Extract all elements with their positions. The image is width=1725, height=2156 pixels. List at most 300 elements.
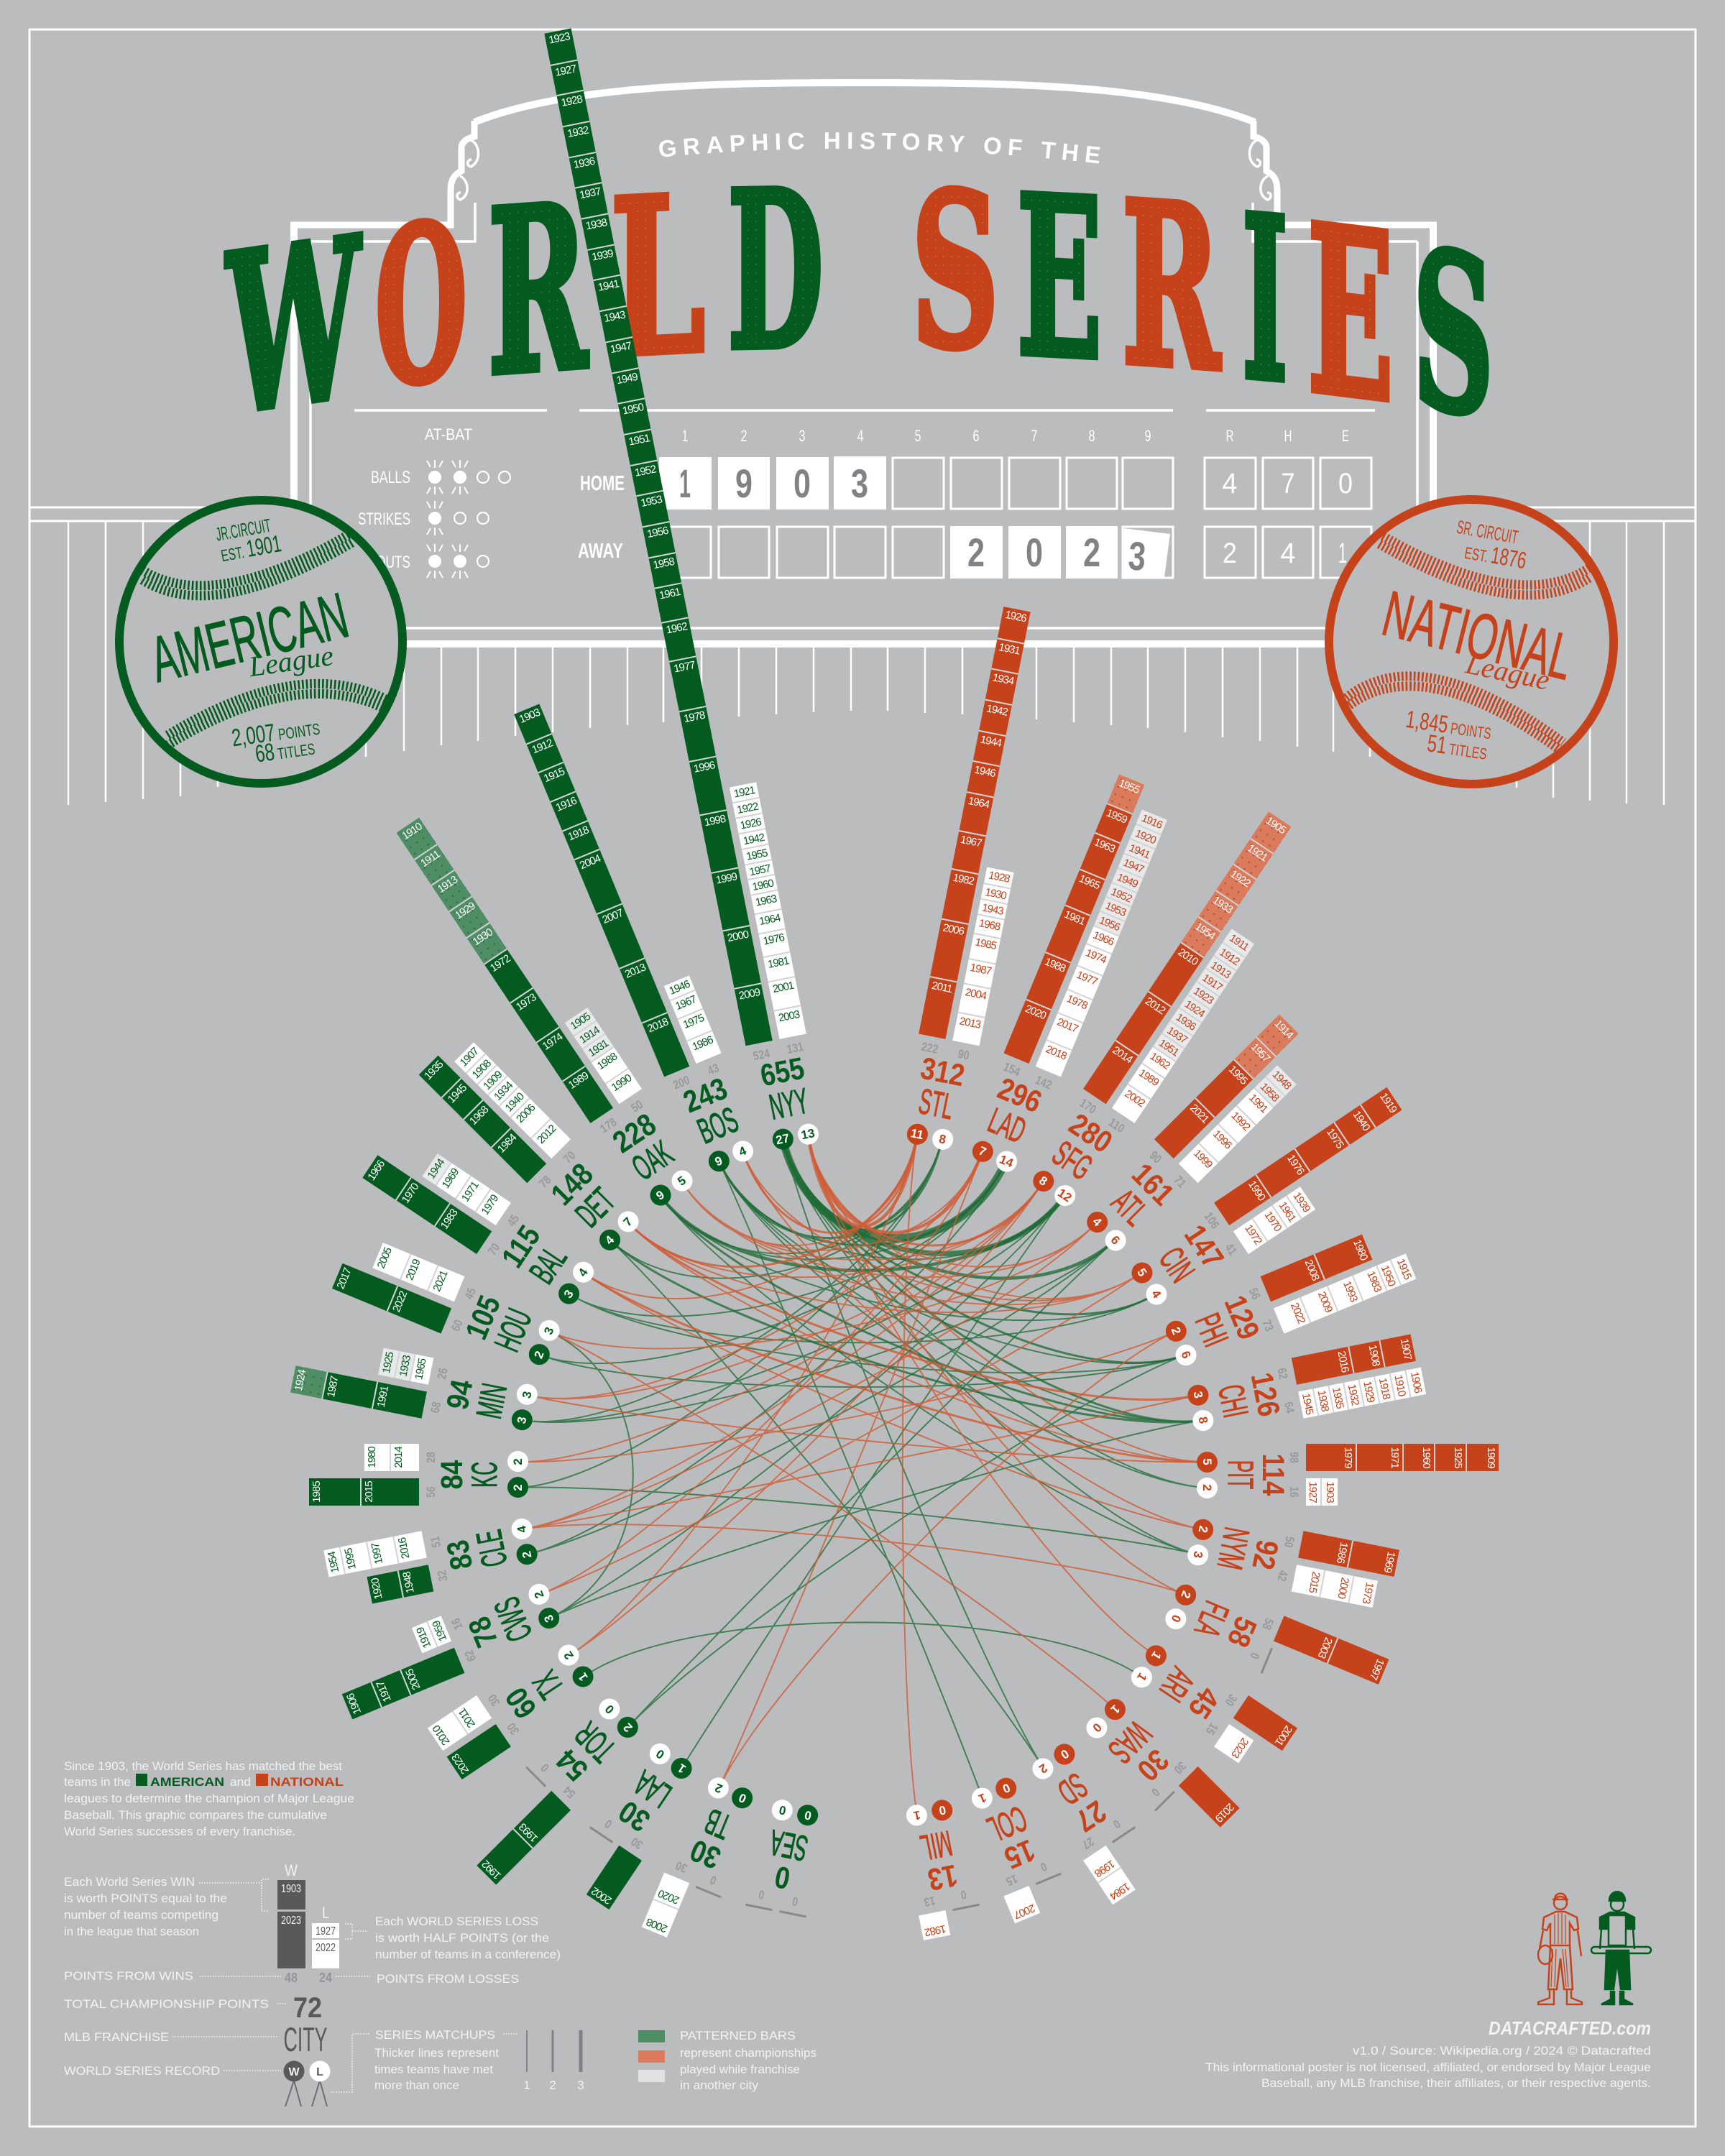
scoreboard: 2 — [1223, 538, 1237, 569]
text: 0 — [602, 1817, 615, 1831]
CIN wins bar — [1214, 1087, 1402, 1225]
ATL losses bar: 1992 — [1228, 1110, 1252, 1133]
CHI wins bar: 1907 — [1398, 1337, 1414, 1360]
MIN losses bar: 1933 — [397, 1355, 413, 1378]
LAD losses bar: 2018 — [1044, 1043, 1068, 1062]
text: 90 — [957, 1047, 970, 1063]
LAD wins bar: 1965 — [1077, 872, 1102, 892]
BOS wins bar: 1915 — [542, 766, 566, 785]
NYY wins bar: 1928 — [560, 93, 583, 109]
text: 3 — [561, 1287, 576, 1301]
text: 129 — [1218, 1291, 1266, 1345]
scoreboard: R — [1226, 427, 1233, 445]
ATL losses bar: 1996 — [1210, 1128, 1234, 1151]
NYY wins bar: 1953 — [640, 494, 663, 510]
NYM losses bar: 2000 — [1335, 1576, 1351, 1600]
how-to-read legend: SERIES MATCHUPS — [375, 2028, 495, 2042]
CHI losses bar — [1298, 1368, 1427, 1419]
national league teams — [0, 0, 1725, 1]
STL losses bar: 1985 — [974, 936, 997, 952]
NYY wins bar: 1961 — [658, 586, 681, 602]
text: 6 — [1108, 1233, 1123, 1247]
LAD wins bar: 1963 — [1092, 836, 1116, 855]
text: 2 — [1179, 1589, 1194, 1600]
NYY wins bar: 1952 — [634, 463, 657, 479]
team: HOU — [332, 1243, 559, 1365]
CIN wins bar: 1975 — [1324, 1126, 1346, 1151]
text: 90 — [1146, 1148, 1164, 1166]
team: COL — [862, 1474, 863, 1475]
baseball badge: national league: 1,845 POINTS — [1404, 706, 1494, 745]
DET wins bar: 1968 — [467, 1104, 491, 1128]
NYY losses bar: 1942 — [742, 831, 765, 847]
text: 15 — [1000, 1833, 1039, 1875]
NYY wins bar: 1927 — [554, 63, 577, 78]
HOU wins bar: 2022 — [390, 1290, 410, 1314]
scoreboard: AWAY — [578, 540, 623, 563]
FLA zero losses — [1261, 1648, 1273, 1674]
text: 58 — [1220, 1612, 1263, 1651]
scoreboard: 4 — [1281, 538, 1295, 569]
NYY wins bar — [544, 28, 773, 1046]
text: 54 — [561, 1783, 579, 1801]
how-to-read legend: 3 — [577, 2078, 584, 2092]
TB zero wins — [695, 1886, 722, 1898]
SFG losses bar: 2002 — [1123, 1087, 1147, 1110]
american league teams — [290, 28, 819, 1938]
text: WAS — [1101, 1713, 1159, 1771]
FLA wins bar: 1997 — [1367, 1657, 1386, 1681]
text: CLE — [469, 1526, 515, 1570]
team: KC — [309, 1444, 528, 1506]
OAK losses bar: 1990 — [609, 1072, 633, 1094]
CIN losses bar: 1970 — [1261, 1210, 1284, 1234]
text: OAK — [625, 1133, 680, 1188]
text: 15 — [1203, 1720, 1220, 1737]
text: 78 — [536, 1173, 554, 1191]
PIT wins bar: 1979 — [1342, 1447, 1354, 1468]
text: 200 — [671, 1073, 691, 1092]
ATL wins bar — [1154, 1015, 1298, 1158]
baseball badge: national league: League — [1463, 647, 1552, 696]
text: 4 — [514, 1524, 529, 1534]
MIN wins bar: 1991 — [375, 1386, 391, 1409]
SFG losses bar: 1937 — [1165, 1024, 1190, 1046]
CHI losses bar: 1938 — [1315, 1389, 1331, 1412]
team: LAA — [586, 1743, 692, 1910]
ATL wins bar: 1914 — [1271, 1018, 1295, 1041]
COL zero wins — [1036, 1873, 1062, 1885]
text: 0 — [1039, 1859, 1049, 1874]
text: 45 — [462, 1286, 479, 1302]
SFG wins bar — [1083, 811, 1291, 1104]
text: 15 — [1004, 1871, 1019, 1889]
title: world series: D — [727, 142, 824, 398]
DET losses bar: 2006 — [514, 1102, 538, 1125]
text: 26 — [435, 1367, 451, 1381]
title: world series — [226, 142, 1494, 467]
scoreboard: H — [1284, 427, 1292, 445]
baseball badge: american league: JR.CIRCUIT — [214, 515, 272, 545]
OAK wins bar: 1972 — [488, 952, 512, 975]
text: 8 — [938, 1131, 947, 1146]
NYY losses bar: 2001 — [772, 980, 795, 995]
team: CLE — [323, 1518, 538, 1604]
OAK losses bar: 1931 — [586, 1038, 610, 1059]
subtitle: graphic history of the: GRAPHIC HISTORY OF THE — [659, 132, 1100, 164]
intro text — [64, 1759, 354, 1838]
CHI losses bar: 1935 — [1330, 1386, 1346, 1409]
text: 2 — [531, 1349, 546, 1360]
SFG wins bar: 1905 — [1264, 814, 1288, 837]
PHI losses bar: 1983 — [1364, 1269, 1384, 1294]
team: CWS — [342, 1584, 559, 1719]
CHI losses bar: 1932 — [1346, 1383, 1361, 1406]
BOS wins bar: 1912 — [530, 737, 554, 756]
CLE losses bar: 1997 — [369, 1542, 385, 1565]
STL wins bar: 1964 — [967, 795, 990, 811]
intro text: teams in the — [64, 1775, 131, 1789]
text: 9 — [713, 1153, 724, 1169]
scoreboard: STRIKES — [358, 510, 410, 529]
text: 30 — [1130, 1742, 1175, 1787]
BOS losses bar: 1986 — [690, 1033, 714, 1053]
BOS losses bar: 1975 — [681, 1012, 706, 1031]
STL wins bar: 1967 — [960, 833, 983, 849]
text: 1 — [575, 1670, 590, 1684]
NYY wins bar: 2000 — [727, 929, 750, 944]
ATL losses bar: 1948 — [1269, 1069, 1293, 1092]
ATL losses bar: 1958 — [1258, 1081, 1281, 1104]
scoreboard: 9 — [1144, 427, 1151, 445]
TOR wins bar — [477, 1791, 571, 1885]
NYM wins bar — [1298, 1531, 1399, 1577]
scoreboard: 1 — [682, 427, 688, 445]
text: 2 — [510, 1458, 525, 1465]
text: 83 — [440, 1537, 479, 1572]
team: SFG — [862, 1474, 863, 1475]
BAL wins bar — [362, 1155, 492, 1254]
baseball badge: american league: AMERICAN — [144, 580, 355, 696]
scoreboard: 0 — [1338, 468, 1353, 499]
KC wins bar: 2015 — [363, 1481, 375, 1503]
footer credits — [1205, 2017, 1651, 2090]
NYY wins bar: 1939 — [591, 247, 614, 264]
team: STL — [862, 1474, 863, 1475]
text: 2 — [1196, 1524, 1211, 1534]
text: LAA — [627, 1762, 678, 1815]
text: 30 — [485, 1692, 503, 1708]
text: 2 — [1036, 1761, 1050, 1777]
PIT wins bar: 1909 — [1485, 1447, 1497, 1468]
CHI losses bar: 1918 — [1376, 1377, 1392, 1400]
CWS losses bar: 1959 — [431, 1619, 450, 1643]
CLE losses bar: 1995 — [342, 1547, 359, 1570]
text: 2 — [620, 1720, 635, 1735]
CIN losses bar: 1939 — [1291, 1190, 1312, 1215]
CLE wins bar: 1948 — [401, 1571, 417, 1594]
DET losses bar: 1909 — [481, 1069, 505, 1092]
text: 178 — [597, 1115, 619, 1135]
NYY wins bar: 1998 — [704, 813, 727, 829]
text: 54 — [550, 1742, 595, 1787]
text: 243 — [678, 1072, 732, 1120]
text: 1 — [1149, 1649, 1164, 1662]
text: BAL — [522, 1239, 575, 1291]
icon: pitcher figure — [1538, 1894, 1582, 2004]
OAK wins bar: 1989 — [566, 1069, 591, 1092]
LAD wins bar: 1955 — [1117, 777, 1141, 796]
text: 2 — [531, 1589, 546, 1600]
LAD losses bar: 1916 — [1140, 811, 1164, 831]
text: 5 — [1135, 1266, 1150, 1279]
text: 0 — [538, 1761, 552, 1774]
COL losses bar: 2007 — [1013, 1902, 1036, 1921]
NYY wins bar: 1947 — [610, 340, 632, 356]
OAK losses bar: 1988 — [595, 1051, 620, 1072]
BOS losses bar: 1946 — [667, 978, 691, 998]
NYM losses bar: 1973 — [1360, 1581, 1376, 1604]
LAD losses bar: 2017 — [1055, 1015, 1080, 1035]
text: 524 — [752, 1046, 771, 1063]
text: 312 — [918, 1051, 967, 1093]
LAA wins bar: 2002 — [590, 1884, 614, 1907]
text: 106 — [1202, 1210, 1222, 1231]
NYY losses bar: 1976 — [762, 931, 785, 947]
how-to-read legend: 24 — [319, 1971, 332, 1985]
NYY wins bar: 1943 — [603, 309, 626, 325]
PHI losses bar: 1993 — [1340, 1279, 1360, 1304]
how-to-read legend: MLB FRANCHISE — [64, 2030, 169, 2044]
text: 2 — [713, 1781, 724, 1796]
text: 58 — [1259, 1616, 1276, 1631]
text: 0 — [1169, 1613, 1184, 1624]
SFG losses bar: 1962 — [1148, 1050, 1172, 1072]
text: 94 — [440, 1377, 479, 1412]
how-to-read legend: played while franchise — [680, 2063, 800, 2076]
text: 27 — [1080, 1834, 1096, 1852]
title: world series: L — [610, 148, 706, 406]
scoreboard: 8 — [1088, 427, 1095, 445]
BAL losses bar: 1979 — [479, 1193, 500, 1217]
team: SEA — [862, 1474, 863, 1475]
text: 16 — [1287, 1486, 1301, 1498]
STL wins bar: 1946 — [973, 764, 996, 780]
footer credits: v1.0 / Source: Wikipedia.org / 2024 © Datacrafted — [1353, 2044, 1651, 2058]
text: 6 — [1179, 1349, 1194, 1360]
TOR wins bar: 1993 — [517, 1821, 540, 1845]
text: FLA — [1187, 1596, 1237, 1643]
text: 0 — [1110, 1817, 1123, 1831]
PHI losses bar: 1915 — [1394, 1257, 1414, 1281]
LAD losses bar: 1947 — [1121, 857, 1146, 876]
NYY wins bar: 1938 — [584, 216, 608, 233]
DET wins bar: 1935 — [422, 1059, 446, 1082]
TX losses bar: 2011 — [456, 1706, 478, 1730]
CWS losses bar: 1919 — [415, 1626, 434, 1649]
text: 9 — [653, 1187, 667, 1202]
team: FLA — [862, 1474, 863, 1475]
PIT wins bar: 1960 — [1420, 1447, 1432, 1468]
text: 1 — [977, 1791, 988, 1806]
text: 27 — [1069, 1794, 1112, 1838]
team: MIN — [290, 1348, 538, 1430]
OAK losses bar: 1905 — [568, 1010, 592, 1032]
STL losses bar — [952, 867, 1013, 1046]
team: TOR — [477, 1699, 638, 1885]
NYY losses bar: 1981 — [767, 954, 790, 970]
LAA zero losses — [589, 1826, 613, 1843]
text: ARI — [1151, 1661, 1202, 1709]
SFG losses bar: 1923 — [1191, 985, 1215, 1007]
NYY wins bar: 1941 — [597, 278, 620, 294]
outfield fence and pickets — [29, 83, 1696, 805]
DET wins bar: 1984 — [495, 1132, 519, 1156]
SFG losses bar: 1924 — [1182, 998, 1207, 1020]
SFG losses bar: 1989 — [1136, 1067, 1161, 1088]
HOU losses bar: 2019 — [403, 1258, 423, 1282]
MIL losses bar: 1982 — [924, 1922, 947, 1939]
SFG losses bar: 1912 — [1217, 946, 1241, 968]
text: 0 — [778, 1803, 787, 1818]
team: DET — [418, 1042, 638, 1250]
text: 3 — [1191, 1550, 1206, 1560]
scoreboard: BALLS — [371, 468, 410, 487]
baseball badge: national league: 51 TITLES — [1425, 729, 1489, 765]
text: 1 — [1135, 1670, 1150, 1684]
KC losses bar: 2014 — [392, 1447, 405, 1468]
NYY losses bar: 2003 — [778, 1008, 801, 1024]
text: 161 — [1125, 1157, 1180, 1212]
SD zero wins — [1112, 1826, 1136, 1843]
text: 30 — [1171, 1759, 1189, 1777]
LAD losses bar: 1949 — [1116, 871, 1139, 890]
team: CIN — [862, 1474, 863, 1475]
FLA wins bar — [1274, 1616, 1389, 1685]
intro text: and — [230, 1775, 251, 1789]
team: SD — [862, 1474, 863, 1475]
PHI losses bar — [1274, 1253, 1417, 1334]
TOR wins bar: 1992 — [479, 1858, 503, 1881]
baseball badge: american league: 2,007 POINTS — [230, 713, 321, 752]
text: 43 — [706, 1061, 721, 1078]
OAK losses bar — [565, 1008, 642, 1104]
BOS wins bar: 2004 — [578, 853, 602, 872]
text: 4 — [575, 1266, 590, 1279]
title: world series: E — [1016, 147, 1103, 410]
BOS wins bar: 2007 — [601, 907, 625, 926]
text: 4 — [602, 1233, 617, 1247]
NYY losses bar: 1926 — [739, 816, 762, 832]
NYY wins bar: 1923 — [548, 30, 571, 47]
team: TX — [428, 1644, 594, 1779]
baseball badge: american league — [119, 500, 402, 783]
CHI wins bar: 2016 — [1335, 1350, 1351, 1373]
text: NYM — [1210, 1524, 1257, 1572]
CIN losses bar — [1233, 1187, 1315, 1254]
scoreboard: AT-BAT — [425, 425, 472, 443]
NYY wins bar: 1951 — [627, 432, 650, 448]
NYM wins bar: 1986 — [1334, 1541, 1350, 1564]
text: KC — [464, 1462, 505, 1488]
SD losses bar: 1984 — [1108, 1880, 1132, 1902]
text: 3 — [1191, 1390, 1206, 1399]
CWS wins bar: 2005 — [404, 1667, 423, 1692]
CWS losses bar — [412, 1616, 451, 1653]
LAD losses bar: 1952 — [1109, 885, 1133, 905]
MIN losses bar: 1925 — [380, 1351, 397, 1374]
ATL losses bar: 1999 — [1191, 1147, 1215, 1171]
text: 16 — [448, 1616, 466, 1631]
OAK losses bar: 1914 — [578, 1025, 602, 1046]
FLA wins bar: 2003 — [1315, 1636, 1335, 1659]
CHI wins bar: 1908 — [1366, 1344, 1382, 1367]
OAK wins bar: 1929 — [453, 900, 477, 922]
MIN losses bar — [378, 1348, 434, 1385]
how-to-read legend: is worth POINTS equal to the — [64, 1892, 227, 1905]
scoreboard: 6 — [973, 427, 979, 445]
title: world series: W — [226, 189, 362, 465]
baseball badge: american league: EST. 1901 — [218, 530, 283, 566]
BAL wins bar: 1966 — [365, 1158, 387, 1183]
text: 228 — [607, 1107, 662, 1160]
text: 222 — [920, 1040, 939, 1056]
OAK wins bar: 1911 — [418, 848, 442, 870]
WAS zero losses — [1154, 1791, 1175, 1812]
MIL zero wins — [952, 1904, 980, 1911]
footer credits: Baseball, any MLB franchise, their affiliates, or their respective agents. — [1261, 2076, 1651, 2090]
ATL losses bar: 1991 — [1246, 1092, 1270, 1115]
how-to-read legend: in another city — [680, 2078, 759, 2092]
PHI wins bar — [1261, 1235, 1372, 1302]
CLE losses bar: 1954 — [326, 1551, 341, 1574]
text: 1 — [1108, 1703, 1123, 1717]
american league winners: chords — [518, 1139, 1208, 1798]
text: 30 — [613, 1794, 656, 1838]
team: MIL — [862, 1474, 863, 1475]
national league winners: chords — [518, 1134, 1208, 1815]
how-to-read legend: L — [316, 2066, 323, 2078]
how-to-read legend: times teams have met — [374, 2063, 493, 2076]
DET wins bar: 1945 — [445, 1082, 469, 1105]
MIN wins bar: 1924 — [293, 1369, 309, 1392]
STL wins bar: 2011 — [931, 980, 953, 995]
text: 0 — [1000, 1781, 1012, 1796]
how-to-read legend: POINTS FROM LOSSES — [377, 1972, 519, 1986]
STL wins bar: 2006 — [942, 922, 965, 938]
SFG losses bar: 1936 — [1174, 1011, 1198, 1033]
how-to-read legend: 2022 — [316, 1942, 336, 1954]
STL wins bar: 1931 — [998, 641, 1021, 657]
MIN wins bar: 1987 — [325, 1376, 341, 1399]
NYY losses bar: 1960 — [751, 877, 774, 893]
scoreboard: 3 — [1127, 533, 1147, 579]
scoreboard: HOME — [580, 472, 625, 495]
team: ATL — [862, 1474, 863, 1475]
text: 0 — [960, 1887, 967, 1902]
CIN wins bar: 1990 — [1246, 1179, 1268, 1203]
text: SD — [1051, 1765, 1095, 1813]
LAD losses bar: 1974 — [1084, 947, 1108, 967]
KC losses bar — [364, 1444, 419, 1471]
LAD wins bar: 1988 — [1043, 956, 1067, 975]
BAL losses bar: 1944 — [426, 1157, 447, 1181]
text: 32 — [435, 1569, 451, 1583]
scoreboard: 0 — [794, 461, 811, 506]
LAD losses bar: 1941 — [1127, 842, 1151, 861]
ATL wins bar: 1957 — [1248, 1041, 1272, 1064]
NYY losses bar: 1963 — [755, 893, 778, 909]
